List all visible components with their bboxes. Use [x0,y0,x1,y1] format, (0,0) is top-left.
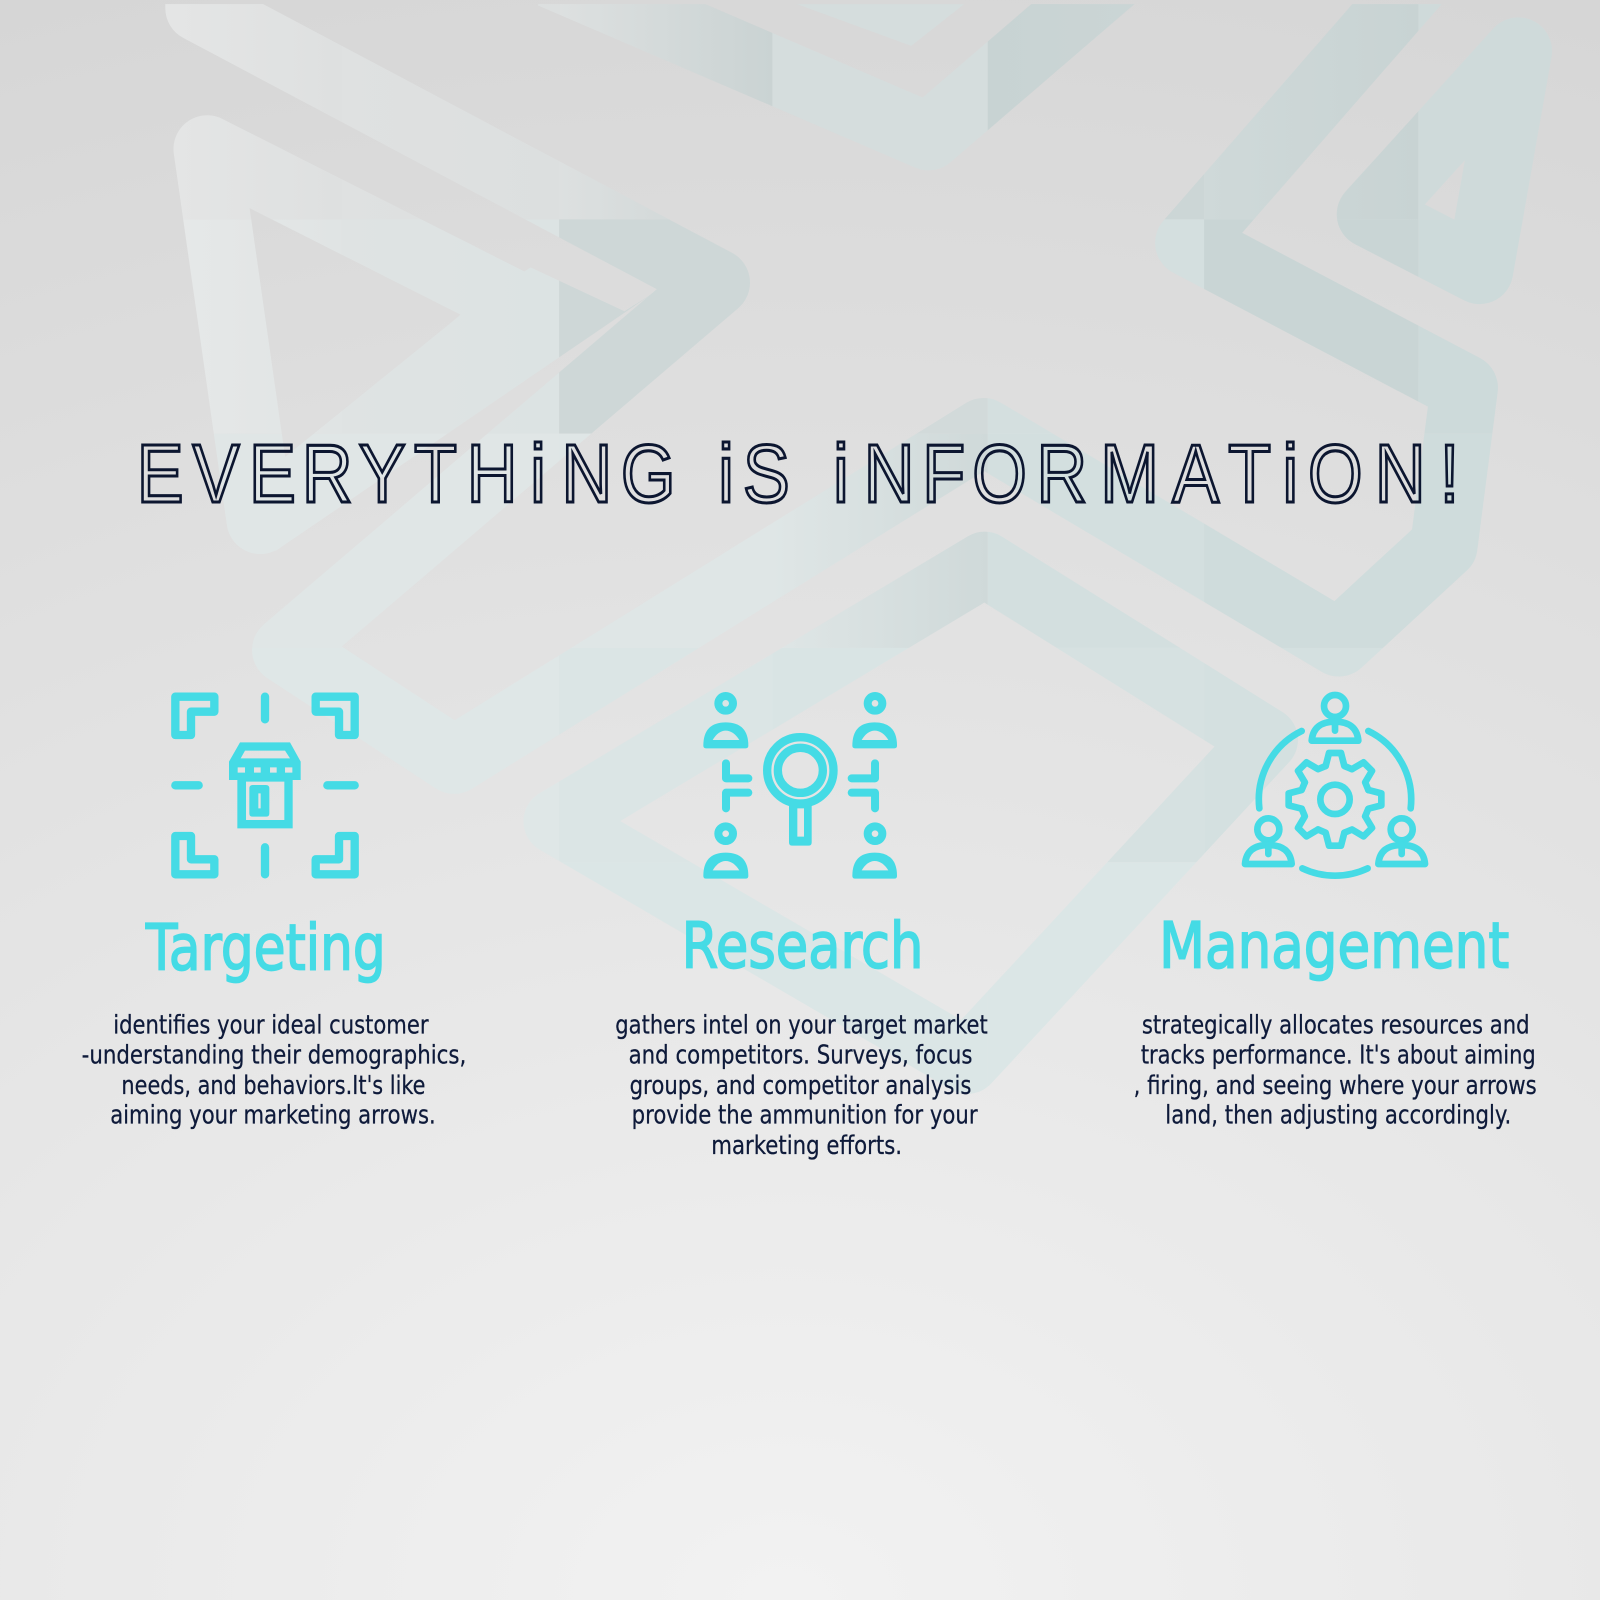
text: targeting description: needs, and behaviors.It's like [121,1071,426,1101]
text: management description: strategically allocates resources and [1142,1011,1530,1041]
text: research description: groups, and competitor analysis [630,1071,971,1101]
icon: store in target frame [175,697,355,874]
heading: management: Management [1159,908,1509,982]
text: targeting description: identifies your ideal customer [113,1011,429,1041]
panel: management [1134,695,1537,1130]
text: management description [1134,1011,1537,1130]
panel: targeting [82,697,466,1130]
text: research description: provide the ammunition for your [632,1100,978,1130]
text: targeting description: aiming your marketing arrows. [110,1100,436,1130]
text: targeting description: -understanding their demographics, [82,1040,466,1070]
text: management description: land, then adjusting accordingly. [1165,1100,1511,1130]
background: translucent interlocking arrow bands [166,4,1550,1094]
icon: team around gear [1245,695,1425,876]
text: research description [615,1011,988,1161]
text: research description: marketing efforts. [711,1131,902,1161]
icon: people and magnifier [703,696,897,879]
title: EVERYTHiNG iS iNFORMATiON! [137,429,1459,520]
text: targeting description [82,1011,466,1130]
heading: research: Research [682,908,923,982]
heading: targeting: Targeting [145,910,386,984]
panel: research [615,696,988,1161]
text: research description: gathers intel on your target market [615,1011,988,1041]
text: research description: and competitors. Surveys, focus [629,1040,972,1070]
